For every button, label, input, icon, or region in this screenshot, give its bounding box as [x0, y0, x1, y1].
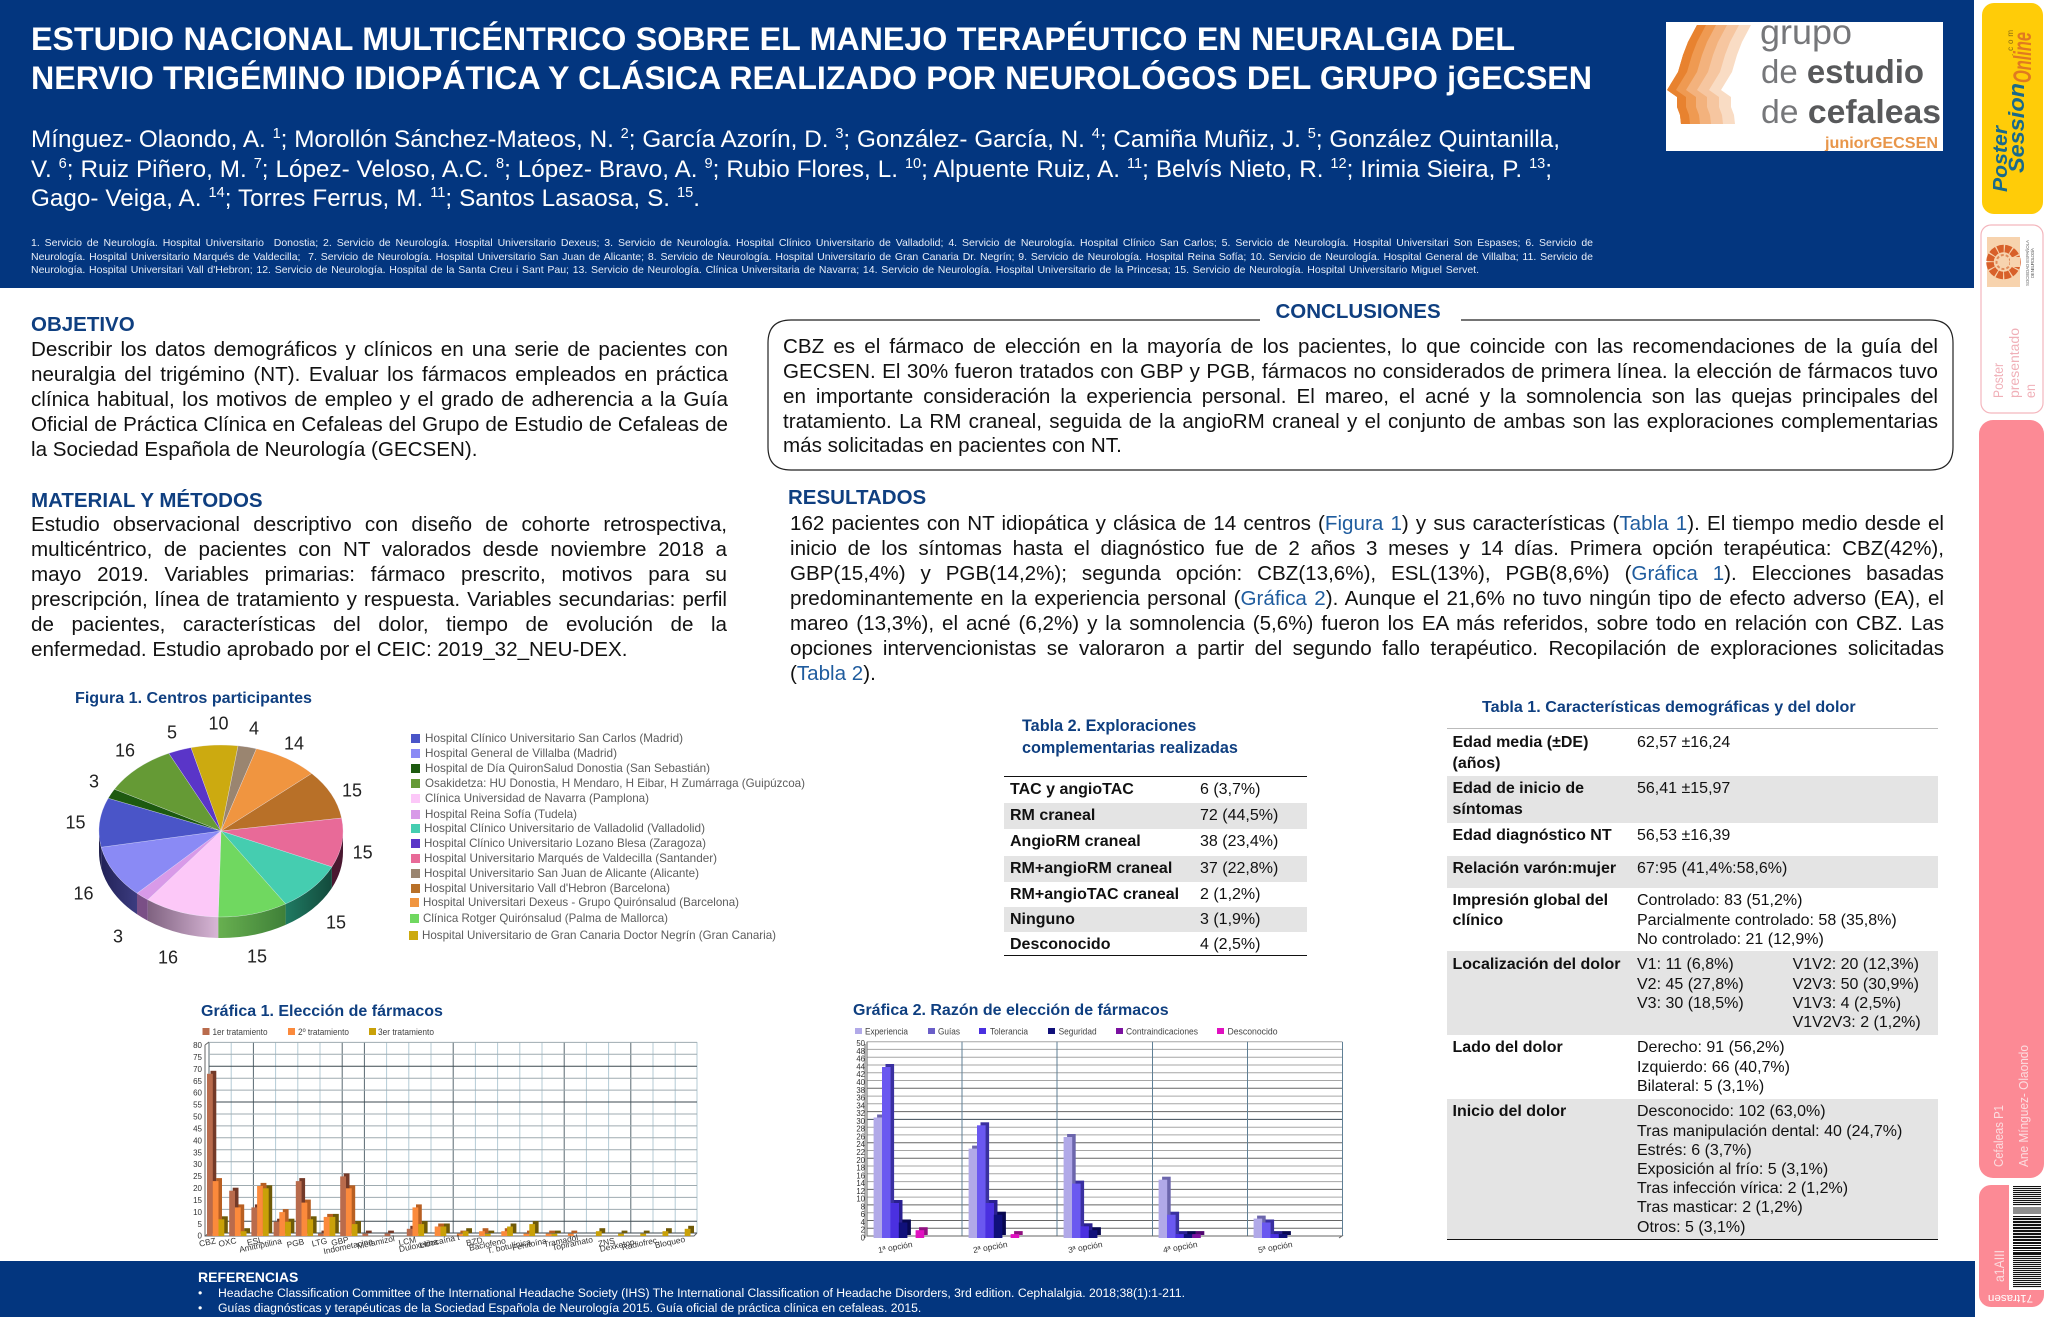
chart 1 y axis: 45 — [193, 1124, 203, 1134]
row: RM craneal: 72 (44,5%) — [1200, 807, 1278, 824]
row: inicio del dolor: Tras infección vírica: 2 (1,2%) — [1637, 1180, 1848, 1197]
pie legend: Hospital Clínico Universitario Lozano Blesa (Zaragoza) — [424, 836, 706, 850]
row: inicio del dolor: Desconocido: 102 (63,0%) — [1637, 1103, 1826, 1120]
row: relación varón:mujer: Relación varón:mujer — [1452, 860, 1616, 877]
chart 2 y axis: 8 — [861, 1202, 865, 1211]
row: Ninguno: 3 (1,9%) — [1200, 911, 1260, 928]
pie value labels: 16 — [115, 740, 135, 760]
caption: Poster presentado en: en — [2023, 384, 2038, 398]
row: edad media: 62,57 ±16,24 — [1637, 734, 1730, 751]
row: edad de inicio: síntomas — [1452, 801, 1523, 818]
pie value labels: 14 — [284, 734, 304, 754]
chart 1 legend: 2º tratamiento — [298, 1027, 349, 1037]
row: edad media — [1452, 734, 1730, 772]
chart 2 x labels: 4ª opción — [1162, 1239, 1199, 1255]
chart 2 y axis: 20 — [856, 1156, 866, 1165]
heading: referencias: REFERENCIAS — [198, 1269, 298, 1285]
chart 1 x labels: Baclofeno — [468, 1235, 507, 1253]
text: conclusiones: más solicitadas en pacientes con NT. — [783, 434, 1122, 457]
bar chart: Gráfica 1 elección de fármacos — [193, 1027, 697, 1256]
heading: gráfica 2: Gráfica 2. Razón de elección de fármacos — [853, 1002, 1169, 1019]
chart 2 y axis: 48 — [856, 1047, 865, 1056]
pie value labels: 15 — [65, 812, 86, 832]
caption: Poster presentado en — [1991, 328, 2038, 398]
sidebar: PosterSessionOnline badge: .com — [2006, 30, 2015, 56]
chart 1 bars — [207, 1071, 694, 1236]
row: inicio del dolor: Otros: 5 (3,1%) — [1637, 1219, 1745, 1236]
chart 2 y axis: 0 — [861, 1234, 866, 1242]
chart 2 y axis — [856, 1039, 866, 1242]
chart 1 y axis: 20 — [193, 1184, 203, 1193]
chart 2 y axis: 50 — [856, 1039, 866, 1048]
chart 2 y axis: 12 — [856, 1187, 865, 1196]
sidebar: session panel: Cefaleas P1 — [1991, 1105, 2006, 1167]
chart 2 legend: Desconocido — [1228, 1026, 1278, 1036]
row: edad diagnóstico: 56,53 ±16,39 — [1637, 827, 1730, 844]
row: RM+angioTAC craneal: RM+angioTAC craneal — [1010, 886, 1179, 903]
pie legend: Hospital Universitari Dexeus - Grupo Quirónsalud (Barcelona) — [423, 895, 739, 909]
pie value labels: 15 — [353, 842, 373, 862]
sidebar: poster presented at — [1981, 225, 2043, 413]
affiliations: Neurología. Hospital Universitari Vall d'Hebron; 12. Servicio de Neurología. Hospital de la Santa Creu i Sant Pau; 13. Servicio de Neurología. Clínica Universitaria de Navarra; 14. Servicio de Neurología. Hospital Universitario de la Princesa; 15. Servicio de Neurología. Hospital Universitario Miguel Servet. — [31, 264, 1479, 276]
heading: figura 1: Figura 1. Centros participantes — [75, 689, 312, 707]
chart 2 y axis: 36 — [856, 1094, 865, 1103]
text: objetivo: la Sociedad Española de Neurología (GECSEN). — [31, 438, 477, 461]
society small caption: SOCIEDAD ESPAÑOLA — [2025, 240, 2030, 286]
conclusions rounded frame — [768, 320, 1953, 470]
row: RM+angioRM craneal: RM+angioRM craneal — [1010, 860, 1172, 876]
chart 1 y axis: 30 — [193, 1160, 203, 1169]
authors: V. 6; Ruiz Piñero, M. 7; López- Veloso, A.C. 8; López- Bravo, A. 9; Rubio Flores, L. 10; Alpuente Ruiz, A. 11; Belvís Nieto, R. 12; Irimia Sieira, P. 13; — [31, 155, 1552, 182]
chart 1 legend: 3er tratamiento — [378, 1027, 434, 1037]
chart 2 y axis: 40 — [856, 1078, 866, 1087]
heading: gráfica 1: Gráfica 1. Elección de fármacos — [201, 1003, 443, 1020]
text: material y métodos: multicéntrico, de pacientes con NT valorados desde noviembre 2018 a — [31, 538, 727, 561]
chart 2 legend: Tolerancia — [990, 1026, 1028, 1036]
row: RM+angioTAC craneal: 2 (1,2%) — [1200, 886, 1260, 903]
text: material y métodos: Estudio observacional descriptivo con diseño de cohorte retrospectiva, — [31, 513, 727, 536]
row: localización del dolor: V1V2V3: 2 (1,2%) — [1793, 1014, 1921, 1031]
sidebar: PosterSessionOnline badge: Poster — [1990, 125, 2012, 192]
chart 1 x labels: LTG — [311, 1236, 328, 1249]
heading: tabla 2 — [1022, 717, 1238, 756]
row: RM craneal: RM craneal — [1010, 807, 1095, 824]
sidebar: session panel: Ane Mínguez- Olaondo — [2016, 1045, 2031, 1167]
chart 2 y axis: 34 — [856, 1101, 866, 1110]
affiliations: Neurología. Hospital Universitario Marqués de Valdecilla; 7. Servicio de Neurología. Hospital Universitario San Juan de Alicante; 8. Servicio de Neurología. Hospital Universitario de Gran Canaria Dr. Negrín; 9. Servicio de Neurología. Hospital Reina Sofía; 10. Servicio de Neurología. Hospital General de Villalba; 11. Servicio de — [31, 251, 1593, 263]
text: resultados: 162 pacientes con NT idiopática y clásica de 14 centros (Figura 1) y sus características (Tabla 1). El tiempo medio desde el — [790, 512, 1944, 535]
row: inicio del dolor: Estrés: 6 (3,7%) — [1637, 1142, 1752, 1159]
chart 1 x labels: PGB — [286, 1236, 305, 1250]
row: impresión global: Impresión global del — [1452, 892, 1608, 909]
authors: Mínguez- Olaondo, A. 1; Morollón Sánchez-Mateos, N. 2; García Azorín, D. 3; González- García, N. 4; Camiña Muñiz, J. 5; González Quintanilla, — [31, 126, 1560, 153]
pie legend: Hospital General de Villalba (Madrid) — [425, 746, 617, 760]
chart 1 y axis: 15 — [193, 1196, 203, 1205]
row: edad de inicio — [1447, 776, 1938, 823]
row: Desconocido — [1010, 936, 1260, 953]
pie legend: Hospital Universitario San Juan de Alicante (Alicante) — [424, 866, 699, 880]
row: AngioRM craneal: AngioRM craneal — [1010, 833, 1141, 850]
row: inicio del dolor: Exposición al frío: 5 (3,1%) — [1637, 1161, 1828, 1178]
icon: layered orange face profiles — [1667, 25, 1751, 124]
row: TAC y angioTAC — [1010, 781, 1260, 798]
chart 2 x labels: 5ª opción — [1257, 1239, 1294, 1255]
row: TAC y angioTAC: TAC y angioTAC — [1010, 781, 1134, 798]
affiliations: 1. Servicio de Neurología. Hospital Universitario Donostia; 2. Servicio de Neurología. Hospital Universitario Dexeus; 3. Servicio de Neurología. Hospital Clínico Universitario de Valladolid; 4. Servicio de Neurología. Hospital Clínico San Carlos; 5. Servicio de Neurología. Hospital Universitari Son Espases; 6. Servicio de — [31, 237, 1593, 249]
text: material y métodos: prescripción, línea de tratamiento y respuesta. Variables secundarias: perfil — [31, 588, 727, 611]
reference 2: • — [198, 1301, 202, 1315]
title — [31, 20, 1592, 96]
society small caption: DE NEUROLOGÍA — [2030, 248, 2035, 278]
pie value labels: 3 — [89, 772, 99, 792]
text: resultados: mareo (13,3%), el acné (6,2%) y la somnolencia (5,6%) fueron los EA más referidos, sobre todo en relación con CBZ. Las — [790, 612, 1944, 635]
chart 1 y axis: 60 — [193, 1089, 203, 1098]
row: Desconocido: 4 (2,5%) — [1200, 936, 1260, 953]
text: resultados: opciones intervencionistas se valoraron a partir del segundo fallo terapéutico. Recopilación de exploraciones solicitadas — [790, 637, 1944, 660]
chart 1 y axis: 50 — [193, 1113, 203, 1122]
row: AngioRM craneal: 38 (23,4%) — [1200, 833, 1278, 850]
heading: tabla 2: Tabla 2. Exploraciones — [1022, 717, 1196, 735]
sidebar: code panel with barcode — [1979, 1185, 2044, 1307]
pie legend: Hospital Universitario de Gran Canaria Doctor Negrín (Gran Canaria) — [422, 928, 776, 942]
chart 1 y axis: 5 — [198, 1220, 203, 1229]
text: resultados — [790, 512, 1944, 685]
row: RM+angioTAC craneal — [1010, 886, 1260, 903]
chart 2 y axis: 32 — [856, 1109, 865, 1118]
row: inicio del dolor: Tras masticar: 2 (1,2%) — [1637, 1199, 1803, 1216]
sidebar: code panel with barcode: a1AIII — [1991, 1250, 2007, 1282]
pie value labels: 15 — [342, 780, 362, 800]
pie legend — [409, 731, 805, 942]
chart 2 y axis: 22 — [856, 1148, 865, 1157]
chart 1 x labels: Metamizol — [356, 1233, 396, 1251]
heading: conclusiones: CONCLUSIONES — [1276, 300, 1441, 323]
chart 1 x labels: Fenitoína — [511, 1235, 548, 1253]
reference 1: Headache Classification Committee of the International Headache Society (IHS) The International Classification of Headache Disorders, 3rd edition. Cephalalgia. 2018;38(1):1-211. — [218, 1286, 1185, 1300]
row: inicio del dolor: Inicio del dolor — [1452, 1103, 1566, 1120]
chart 1 x labels: Tramadol — [543, 1232, 579, 1249]
chart 1 x labels: OXC — [217, 1235, 237, 1249]
row: RM craneal — [1004, 803, 1306, 829]
text: material y métodos: enfermedad. Estudio aprobado por el CEIC: 2019_32_NEU-DEX. — [31, 638, 627, 661]
chart 2 legend — [855, 1026, 1278, 1036]
pie legend: Hospital Clínico Universitario San Carlos (Madrid) — [425, 731, 683, 745]
chart 2 bars — [874, 1064, 1291, 1238]
row: localización del dolor: V3: 30 (18,5%) — [1637, 995, 1744, 1012]
row: Desconocido: Desconocido — [1010, 936, 1110, 953]
text: material y métodos: de pacientes, características del dolor, tiempo de evolución de la — [31, 613, 727, 636]
chart 2 y axis: 26 — [856, 1132, 865, 1141]
referencias — [198, 1269, 1185, 1315]
society small caption — [2025, 240, 2035, 286]
chart 2 legend: Contraindicaciones — [1126, 1026, 1198, 1036]
heading: resultados: RESULTADOS — [788, 486, 926, 508]
reference 1: • — [198, 1286, 202, 1300]
chart 2 y axis: 46 — [856, 1055, 865, 1064]
chart 1 x labels: Indometacina — [322, 1236, 374, 1256]
pie side walls — [99, 831, 343, 938]
title: ESTUDIO NACIONAL MULTICÉNTRICO SOBRE EL MANEJO TERAPÉUTICO EN NEURALGIA DEL — [31, 20, 1515, 56]
row: lado del dolor: Bilateral: 5 (3,1%) — [1637, 1078, 1764, 1095]
row: localización del dolor: V2: 45 (27,8%) — [1637, 976, 1744, 992]
chart 1 y axis: 40 — [193, 1136, 203, 1145]
text: conclusiones: GECSEN. El 30% fueron tratados con GBP y PGB, fármacos no considerados de primera línea. la elección de fármacos tuvo — [783, 360, 1938, 383]
pie chart: centros participantes — [65, 714, 373, 968]
text: conclusiones — [783, 335, 1938, 457]
logo wordmark: juniorGECSEN — [1824, 135, 1938, 152]
chart 1 x labels: ESL — [246, 1234, 264, 1248]
bar chart: Gráfica 2 razón de elección — [855, 1026, 1342, 1255]
row: edad media: (años) — [1452, 755, 1500, 772]
chart 1 y axis: 80 — [193, 1041, 203, 1050]
row: localización del dolor — [1447, 951, 1938, 1035]
caption: Poster presentado en: presentado — [2007, 328, 2022, 398]
pie value labels: 3 — [113, 926, 123, 946]
sidebar: code panel with barcode: 71trasen — [1988, 1292, 2033, 1304]
row: relación varón:mujer: 67:95 (41,4%:58,6%) — [1637, 860, 1787, 877]
chart 2 y axis: 44 — [856, 1062, 866, 1072]
sidebar: session panel — [1979, 420, 2044, 1178]
sidebar: PosterSessionOnline badge: Session — [2004, 83, 2029, 173]
chart 2 x labels — [877, 1239, 1294, 1255]
pie legend: Osakidetza: HU Donostia, H Mendaro, H Eibar, H Zumárraga (Guipúzcoa) — [425, 776, 805, 790]
pie legend: Hospital Reina Sofía (Tudela) — [425, 807, 577, 821]
text: resultados: predominantemente en la experiencia personal (Gráfica 2). Aunque el 21,6% no tuvo ningún tipo de efecto adverso (EA), el — [790, 587, 1944, 610]
chart 2 y axis: 14 — [856, 1179, 866, 1188]
affiliations — [31, 237, 1593, 276]
chart 2 legend: Experiencia — [865, 1026, 908, 1036]
authors — [31, 126, 1560, 212]
row: Ninguno — [1004, 907, 1306, 932]
chart 2 x labels: 3ª opción — [1067, 1239, 1104, 1255]
chart 1 y axis: 75 — [193, 1053, 203, 1062]
logo: grupo de estudio de cefaleas — [1666, 22, 1943, 151]
chart 2 grid — [865, 1042, 1342, 1238]
text: conclusiones: tratamiento. La RM craneal, seguida de la angioRM craneal y el conjunto de ambas son las exploraciones complementarias — [783, 410, 1938, 433]
pie value labels: 10 — [208, 714, 229, 734]
sidebar: PosterSessionOnline badge — [1982, 3, 2043, 214]
chart 2 y axis: 6 — [861, 1210, 865, 1219]
chart 2 y axis: 2 — [861, 1226, 865, 1235]
chart 1 y axis: 35 — [193, 1148, 203, 1157]
pie legend: Hospital Universitario Vall d'Hebron (Barcelona) — [424, 881, 670, 895]
text: objetivo: Oficial de Práctica Clínica en Cefaleas del Grupo de Estudio de Cefaleas de — [31, 413, 728, 436]
chart 1 x labels: Lidocaína t — [418, 1232, 461, 1250]
chart 1 x labels: Radiofrec. — [621, 1235, 660, 1252]
logo wordmark: de cefaleas — [1761, 93, 1941, 130]
text: objetivo: neuralgia del trigémino (NT). Evaluar los fármacos empleados en práctica — [31, 363, 728, 386]
chart 1 x labels: GBP — [330, 1234, 350, 1248]
chart 2 y axis: 42 — [856, 1070, 865, 1079]
chart 2 legend: Seguridad — [1059, 1026, 1097, 1036]
chart 1 grid — [205, 1042, 697, 1236]
title: NERVIO TRIGÉMINO IDIOPÁTICA Y CLÁSICA REALIZADO POR NEUROLÓGOS DEL GRUPO jGECSEN — [31, 60, 1592, 96]
text: resultados: GBP(15,4%) y PGB(14,2%); segunda opción: CBZ(13,6%), ESL(13%), PGB(8,6%) (Gráfica 1). Elecciones basadas — [790, 562, 1944, 585]
pie value labels: 15 — [247, 946, 267, 966]
pie legend: Clínica Rotger Quirónsalud (Palma de Mallorca) — [423, 911, 668, 925]
chart 1 y axis: 55 — [193, 1101, 203, 1110]
pie value labels: 4 — [249, 718, 259, 738]
row: RM+angioRM craneal: 37 (22,8%) — [1200, 860, 1278, 876]
row: impresión global: Controlado: 83 (51,2%) — [1637, 892, 1802, 909]
chart 1 x labels: LCM — [398, 1234, 417, 1248]
table 2: exploraciones complementarias — [1004, 776, 1306, 956]
pie legend: Clínica Universidad de Navarra (Pamplona) — [425, 791, 649, 805]
pie value labels: 16 — [158, 948, 178, 968]
text: objetivo: Describir los datos demográficos y clínicos en una serie de pacientes con — [31, 338, 728, 361]
text: conclusiones: CBZ es el fármaco de elección en la mayoría de los pacientes, lo que coincide con las recomendaciones de la guía del — [783, 335, 1938, 358]
text: material y métodos — [31, 513, 727, 661]
heading: objetivo: OBJETIVO — [31, 313, 135, 336]
reference 2: Guías diagnósticas y terapéuticas de la Sociedad Española de Neurología 2015. Guía oficial de práctica clínica en cefaleas. 2015. — [218, 1301, 921, 1315]
chart 2 y axis: 16 — [856, 1171, 865, 1180]
logo wordmark — [1762, 25, 1940, 151]
chart 2 y axis: 4 — [861, 1218, 866, 1227]
heading: tabla 1: Tabla 1. Características demográficas y del dolor — [1482, 698, 1856, 716]
row: localización del dolor: V1V3: 4 (2,5%) — [1793, 995, 1901, 1012]
chart 1 x labels: Topiramato — [551, 1234, 594, 1253]
chart 1 x labels: Duloxetina — [398, 1236, 439, 1254]
pie slices — [99, 745, 343, 917]
authors: Gago- Veiga, A. 14; Torres Ferrus, M. 11; Santos Lasaosa, S. 15. — [31, 185, 700, 212]
text: objetivo — [31, 338, 728, 461]
chart 1 y axis — [193, 1041, 203, 1241]
table 1: características demográficas y del dolor — [1447, 728, 1938, 1240]
chart 2 x labels: 2ª opción — [972, 1239, 1009, 1255]
row: TAC y angioTAC: 6 (3,7%) — [1200, 781, 1260, 798]
row: edad diagnóstico: Edad diagnóstico NT — [1452, 827, 1612, 844]
chart 2 y axis: 28 — [856, 1125, 865, 1134]
row: localización del dolor: Localización del dolor — [1452, 956, 1621, 973]
row: RM+angioRM craneal — [1004, 856, 1306, 882]
chart 1 y axis: 65 — [193, 1077, 203, 1086]
pie value labels: 15 — [326, 912, 346, 932]
barcode — [2013, 1186, 2041, 1288]
text: material y métodos: mayo 2019. Variables primarias: fármaco prescrito, motivos para su — [31, 563, 727, 586]
chart 1 x labels: Amitriptilina — [238, 1236, 283, 1254]
row: AngioRM craneal — [1010, 833, 1278, 850]
text: objetivo: clínica habitual, los motivos de empleo y el grado de adherencia a la Guía — [31, 388, 728, 411]
header band — [0, 0, 1974, 288]
row: localización del dolor: V1: 11 (6,8%) — [1637, 956, 1734, 973]
heading: material y métodos: MATERIAL Y MÉTODOS — [31, 489, 263, 512]
row: edad de inicio: 56,41 ±15,97 — [1637, 780, 1730, 797]
text: resultados: (Tabla 2). — [790, 662, 876, 685]
row: edad de inicio: Edad de inicio de — [1452, 780, 1584, 797]
text: resultados: inicio de los síntomas hasta el diagnóstico fue de 2 años 3 meses y 14 días. Primera opción terapéutica: CBZ(42%), — [790, 537, 1944, 560]
row: lado del dolor: Derecho: 91 (56,2%) — [1637, 1039, 1785, 1056]
chart 1 x labels: CBZ — [198, 1235, 217, 1249]
row: lado del dolor — [1452, 1039, 1790, 1095]
row: impresión global: No controlado: 21 (12,9%) — [1637, 931, 1824, 948]
pie legend: Hospital Clínico Universitario de Valladolid (Valladolid) — [424, 821, 705, 835]
row: lado del dolor: Izquierdo: 66 (40,7%) — [1637, 1058, 1790, 1076]
heading: tabla 2: complementarias realizadas — [1022, 738, 1238, 756]
pie value labels — [65, 714, 373, 968]
row: impresión global: Parcialmente controlado: 58 (35,8%) — [1637, 912, 1897, 928]
icon: brain section — [1987, 237, 2020, 287]
row: impresión global: clínico — [1452, 912, 1503, 928]
chart 1 x labels: T. botulínica — [486, 1236, 532, 1256]
row: inicio del dolor: Tras manipulación dental: 40 (24,7%) — [1637, 1122, 1902, 1140]
chart 1 y axis: 25 — [193, 1172, 203, 1181]
chart 2 y axis: 10 — [856, 1195, 866, 1204]
chart 2 y axis: 30 — [856, 1117, 866, 1126]
chart 1 y axis: 70 — [193, 1065, 203, 1074]
chart 2 x labels: 1ª opción — [877, 1239, 914, 1255]
logo wordmark: grupo — [1760, 13, 1852, 52]
chart 1 legend — [202, 1027, 434, 1037]
chart 2 y axis: 24 — [856, 1140, 866, 1149]
row: relación varón:mujer — [1447, 856, 1938, 888]
chart 1 y axis: 0 — [198, 1232, 203, 1241]
logo wordmark: de estudio — [1761, 53, 1924, 90]
chart 1 y axis: 10 — [193, 1208, 203, 1217]
sidebar: PosterSessionOnline badge: Online — [2009, 32, 2037, 83]
footer band — [0, 1261, 1975, 1317]
row: localización del dolor: V1V2: 20 (12,3%) — [1793, 956, 1919, 973]
pie value labels: 16 — [73, 884, 94, 904]
row: lado del dolor: Lado del dolor — [1452, 1039, 1563, 1056]
row: edad diagnóstico — [1452, 827, 1730, 844]
row: inicio del dolor — [1447, 1099, 1938, 1239]
row: localización del dolor: V2V3: 50 (30,9%) — [1793, 976, 1919, 992]
pie value labels: 5 — [167, 722, 177, 742]
row: edad media: Edad media (±DE) — [1452, 734, 1588, 751]
chart 2 y axis: 38 — [856, 1086, 865, 1095]
chart 1 legend: 1er tratamiento — [212, 1027, 268, 1037]
chart 1 x labels: ZNS — [597, 1235, 616, 1249]
chart 1 x labels: BZD — [465, 1235, 484, 1248]
pie legend: Hospital de Día QuironSalud Donostia (San Sebastián) — [425, 761, 710, 775]
row: impresión global — [1452, 892, 1897, 948]
chart 1 x labels: Dexketop. — [599, 1236, 638, 1254]
pie legend: Hospital Universitario Marqués de Valdecilla (Santander) — [424, 851, 717, 865]
chart 2 y axis: 18 — [856, 1164, 865, 1172]
caption: Poster presentado en: Poster — [1991, 363, 2006, 398]
chart 1 x labels — [198, 1232, 686, 1256]
text: conclusiones: en importante consideración la experiencia personal. El mareo, el acné y la somnolencia son las quejas principales del — [783, 385, 1938, 408]
chart 1 x labels: Bloqueo — [654, 1234, 686, 1250]
row: Ninguno: Ninguno — [1010, 911, 1075, 928]
chart 2 legend: Guías — [938, 1026, 960, 1036]
